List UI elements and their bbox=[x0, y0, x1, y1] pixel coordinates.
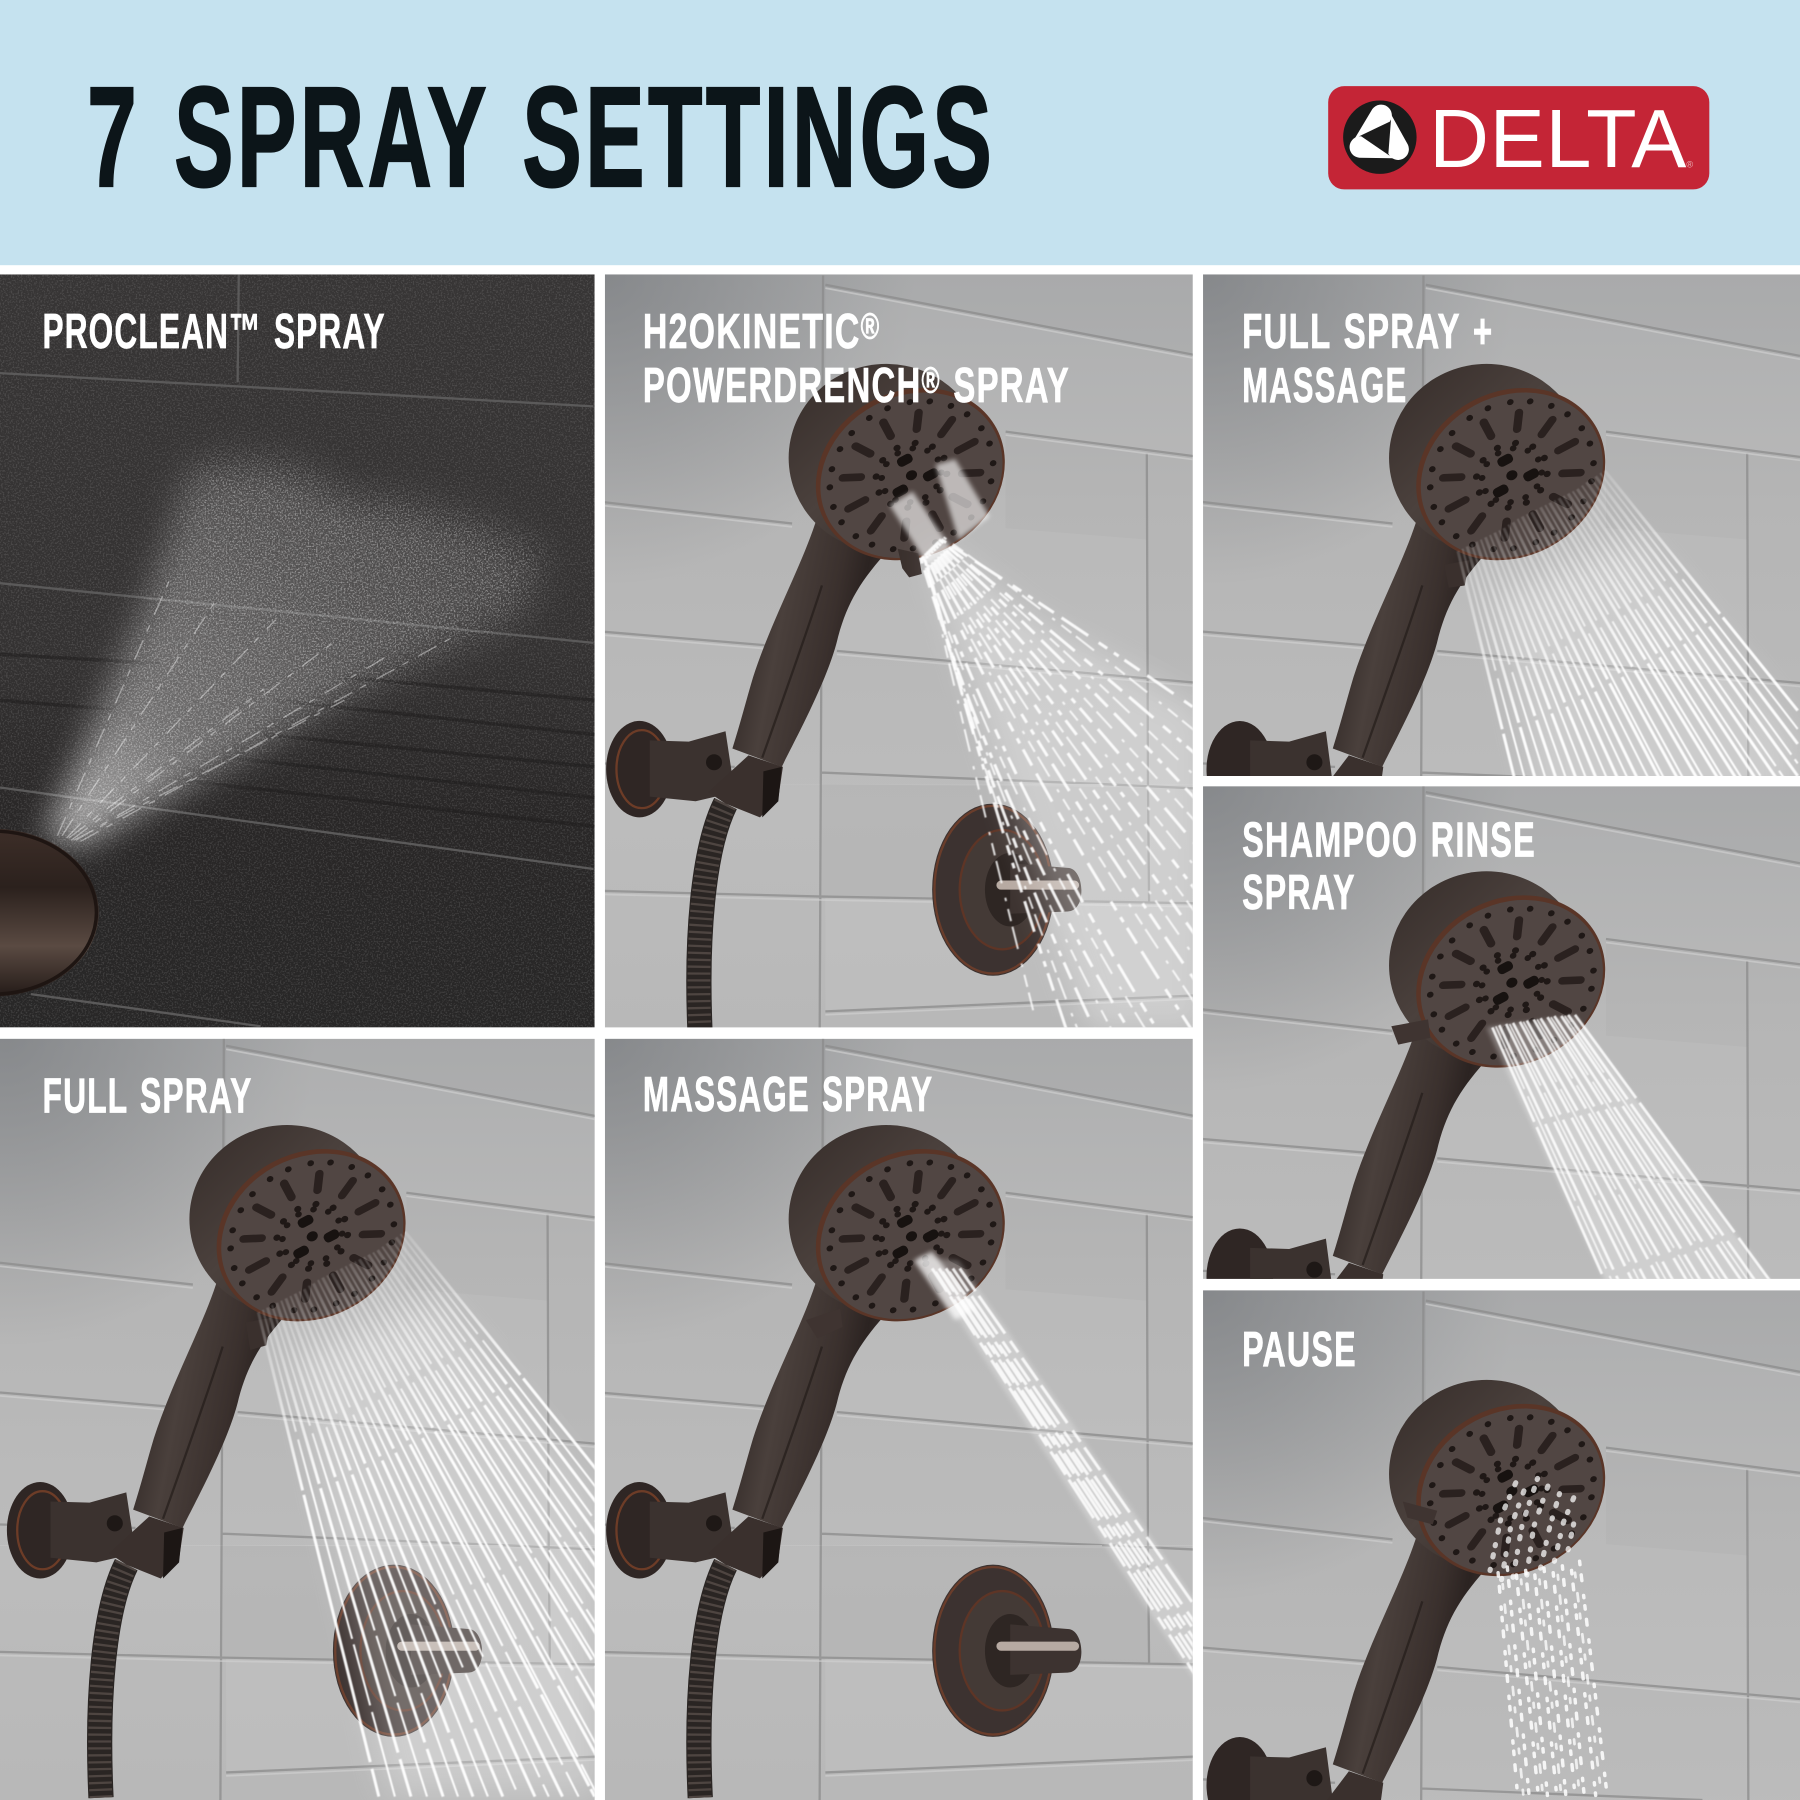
water droplets bbox=[1490, 1476, 1607, 1795]
heading: MASSAGE bbox=[1242, 358, 1407, 413]
water spray bbox=[1458, 471, 1798, 1035]
water spray bbox=[258, 1232, 598, 1797]
shower with wall mount bbox=[1207, 355, 1636, 784]
title: 7 SPRAY SETTINGS bbox=[87, 58, 995, 217]
shower with wall mount and valve bbox=[606, 355, 1081, 1037]
water spray bbox=[914, 1251, 1200, 1688]
header band bbox=[0, 0, 1800, 265]
heading: FULL SPRAY bbox=[42, 1068, 253, 1123]
heading: SHAMPOO RINSE bbox=[1242, 812, 1536, 867]
shower with wall mount bbox=[1207, 863, 1636, 1291]
heading: ® bbox=[921, 360, 941, 401]
panel: Full spray + massage bbox=[1203, 274, 1800, 776]
heading: POWERDRENCH bbox=[643, 358, 1061, 413]
heading: PAUSE bbox=[1242, 1322, 1357, 1377]
shower with wall mount and valve bbox=[606, 1116, 1081, 1798]
heading: PROCLEAN™ SPRAY bbox=[42, 304, 386, 359]
panel: H2Okinetic PowerDrench spray bbox=[604, 274, 1193, 1028]
heading bbox=[643, 304, 1070, 413]
panel: Massage spray bbox=[604, 1038, 1193, 1800]
heading: SPRAY bbox=[1242, 865, 1356, 920]
heading: ® bbox=[861, 306, 880, 347]
Delta logo bbox=[1328, 86, 1709, 189]
Delta logo: DELTA bbox=[1429, 92, 1686, 185]
panel: Full spray bbox=[0, 1038, 595, 1800]
water spray bbox=[1487, 1015, 1774, 1286]
heading: SPRAY bbox=[941, 358, 1070, 413]
panel: Pause bbox=[1203, 1290, 1800, 1800]
shower head edge bbox=[0, 829, 99, 996]
water spray bbox=[890, 459, 1205, 1033]
mist spray bbox=[46, 452, 551, 844]
panel: Shampoo rinse spray bbox=[1203, 786, 1800, 1279]
shower with wall mount bbox=[1207, 1371, 1636, 1800]
shower with wall mount and valve bbox=[7, 1116, 482, 1798]
panel: ProClean spray bbox=[0, 274, 595, 1028]
heading: MASSAGE SPRAY bbox=[643, 1067, 933, 1122]
Delta logo: ® bbox=[1686, 160, 1693, 170]
heading bbox=[1242, 304, 1493, 413]
heading: FULL SPRAY + bbox=[1242, 304, 1493, 359]
heading bbox=[1242, 812, 1536, 920]
heading: H2OKINETIC bbox=[643, 304, 960, 359]
